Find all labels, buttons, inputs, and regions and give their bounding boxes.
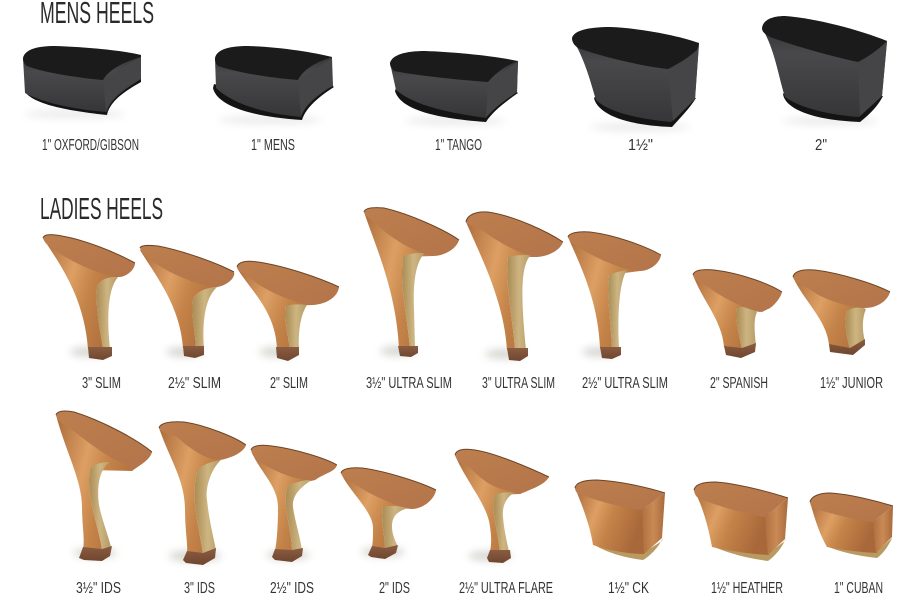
item: 1 inch mens heel	[213, 46, 334, 154]
icon: 2 inch slim heel	[237, 261, 339, 361]
label: 1" MENS	[251, 137, 295, 154]
label: 2" SPANISH	[710, 375, 768, 392]
item: 1.5 inch mens heel	[572, 27, 699, 154]
item: 2.5 inch ids	[251, 445, 337, 594]
item: 1.5 inch heather	[694, 482, 788, 594]
label: 2" SLIM	[270, 375, 308, 392]
label: 1½"	[628, 137, 653, 154]
item: 1.5 inch junior	[793, 270, 890, 392]
item: 3.5 inch ultra slim	[364, 208, 459, 392]
icon: 3 inch slim heel	[43, 235, 135, 360]
icon: 2.5 inch ultra slim heel	[568, 232, 661, 359]
icon: oxford heel	[23, 46, 141, 118]
item: 2.5 inch ultra flare	[455, 449, 553, 594]
icon: 1.5 inch ck heel	[575, 480, 665, 560]
item: 1 inch tango heel	[390, 51, 518, 154]
item: 1 inch cuban	[810, 493, 893, 594]
item: 2 inch ids	[341, 468, 436, 594]
icon: 2.5 inch ultra flare heel	[455, 449, 549, 563]
label: 3" ULTRA SLIM	[482, 375, 555, 392]
icon: 3 inch ids heel	[159, 422, 246, 565]
item: 1.5 inch ck	[575, 480, 665, 594]
label: 2½" ULTRA SLIM	[582, 375, 668, 392]
icon: 3 inch ultra slim heel	[466, 212, 563, 361]
item: 2 inch slim	[237, 261, 339, 392]
item: 2.5 inch slim	[140, 245, 234, 392]
item: 3 inch ultra slim	[466, 212, 563, 392]
label: 1" OXFORD/GIBSON	[42, 137, 139, 154]
label: 2½" SLIM	[168, 375, 221, 392]
icon: 2 inch spanish heel	[693, 270, 782, 358]
item: 1 inch oxford/gibson mens heel	[23, 46, 141, 154]
icon: 3.5 inch ids heel	[56, 411, 152, 561]
icon: 1.5 inch junior heel	[793, 270, 890, 355]
icon: 2 inch heel	[762, 16, 887, 125]
heading: ladies heels: LADIES HEELS	[40, 191, 163, 226]
icon: 3.5 inch ultra slim heel	[364, 208, 459, 357]
label: 1½" JUNIOR	[820, 375, 883, 392]
icon: mens heel	[213, 46, 334, 124]
icon: 2.5 inch ids heel	[251, 445, 337, 562]
label: 3" SLIM	[82, 375, 121, 392]
item: 3 inch slim	[43, 235, 135, 392]
icon: 1 inch cuban heel	[810, 493, 893, 558]
icon: 1.5 inch heel	[572, 27, 699, 131]
item: 3.5 inch ids	[56, 411, 152, 594]
item: 2 inch mens heel	[762, 16, 887, 154]
label: 2"	[815, 137, 827, 154]
item: 2 inch spanish	[693, 270, 782, 392]
icon: 2.5 inch slim heel	[140, 245, 234, 358]
item: 3 inch ids	[159, 422, 246, 594]
icon: 2 inch ids heel	[341, 468, 436, 559]
icon: 1.5 inch heather heel	[694, 482, 788, 561]
label: 1" TANGO	[435, 137, 482, 154]
item: 2.5 inch ultra slim	[568, 232, 668, 392]
icon: tango heel	[390, 51, 518, 125]
label: 3½" ULTRA SLIM	[366, 375, 452, 392]
